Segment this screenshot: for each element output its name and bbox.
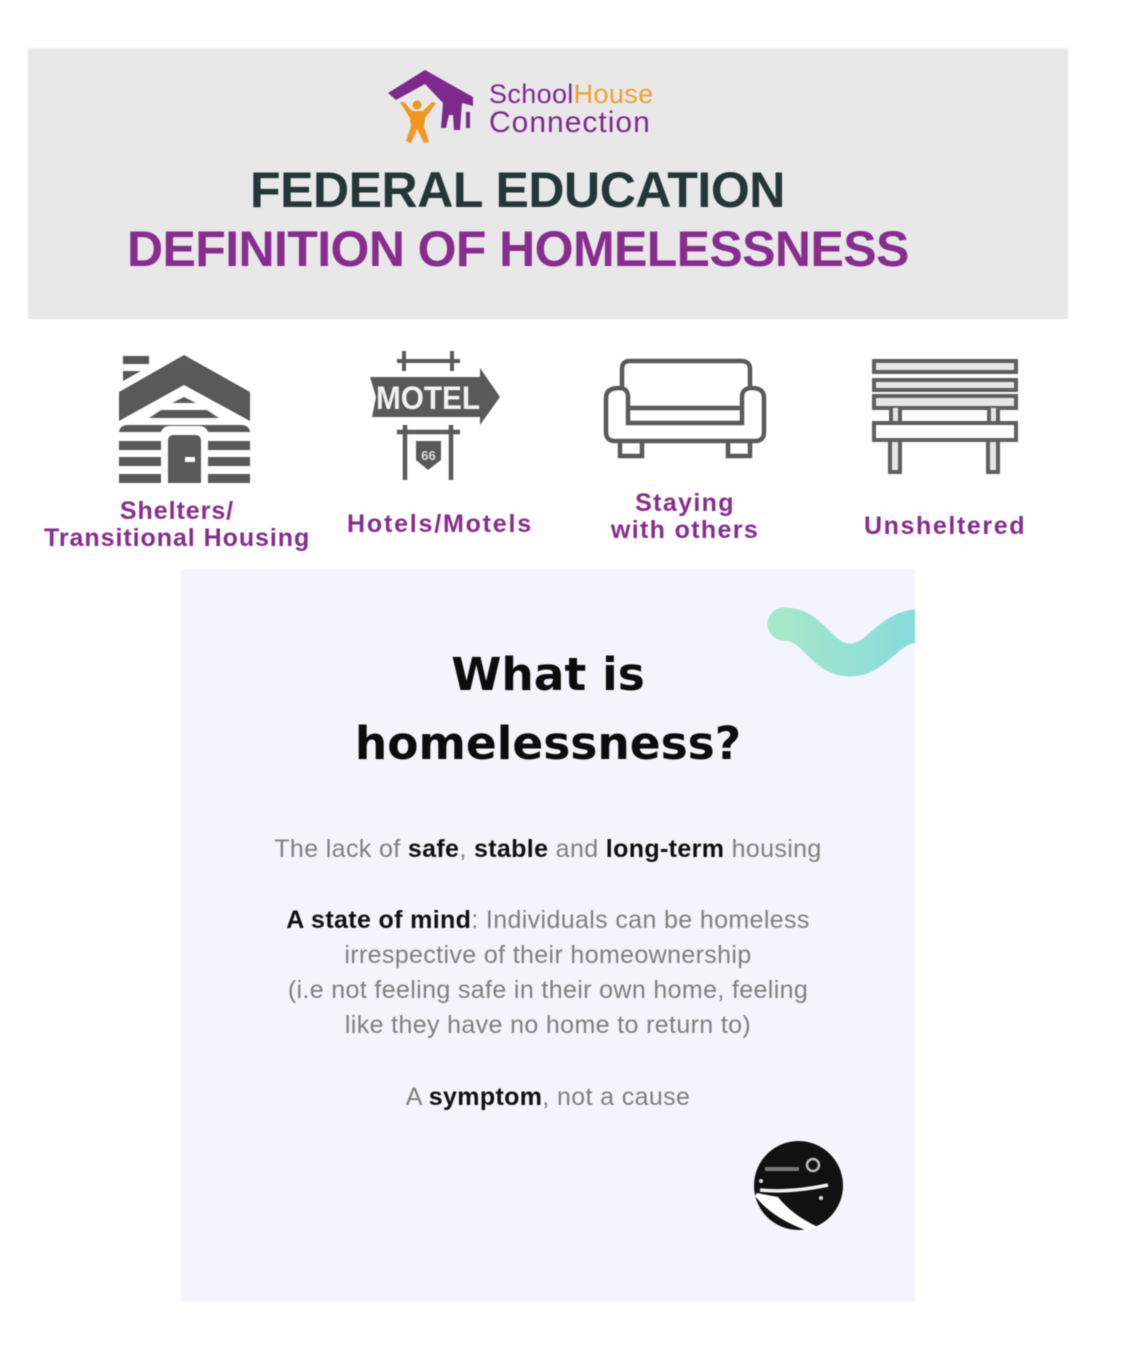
icon: round logo — [753, 1140, 844, 1231]
text: state of mind: like they have no home to return to) — [345, 1011, 751, 1039]
icon: bench — [871, 358, 1019, 475]
label: staying: Staying — [635, 489, 735, 517]
icon: motel sign — [370, 350, 500, 481]
logo: SchoolHouse — [489, 79, 653, 109]
label: shelters: Shelters/ — [120, 497, 234, 525]
logo: Connection — [489, 106, 651, 139]
panel: what is homelessness — [181, 569, 915, 1302]
header panel — [28, 48, 1068, 319]
text: state of mind: A state of mind: Individuals can be homeless — [286, 906, 810, 934]
text: definition: The lack of safe, stable and long-term housing — [274, 835, 822, 863]
icon: couch — [603, 358, 767, 459]
text: state of mind: irrespective of their homeownership — [344, 941, 752, 969]
decorative wave — [767, 607, 916, 677]
text: state of mind: (i.e not feeling safe in their own home, feeling — [288, 976, 808, 1004]
logo — [388, 70, 653, 144]
title line 1: FEDERAL EDUCATION — [250, 162, 785, 218]
label: shelters: Transitional Housing — [44, 524, 310, 552]
label: hotels: Hotels/Motels — [347, 510, 533, 538]
text: symptom: A symptom, not a cause — [406, 1083, 690, 1111]
label: staying — [610, 489, 759, 544]
text: state of mind — [286, 906, 810, 1039]
heading: homelessness? — [355, 717, 741, 770]
icon: cabin — [118, 354, 251, 484]
label: staying: with others — [611, 516, 759, 544]
label: shelters — [44, 497, 310, 552]
icon: motel sign: 66 — [421, 448, 436, 463]
heading: What is — [451, 648, 645, 701]
label: unsheltered: Unsheltered — [864, 512, 1026, 540]
title line 2: DEFINITION OF HOMELESSNESS — [127, 221, 909, 277]
icon: motel sign: MOTEL — [376, 380, 480, 416]
heading — [355, 648, 741, 770]
